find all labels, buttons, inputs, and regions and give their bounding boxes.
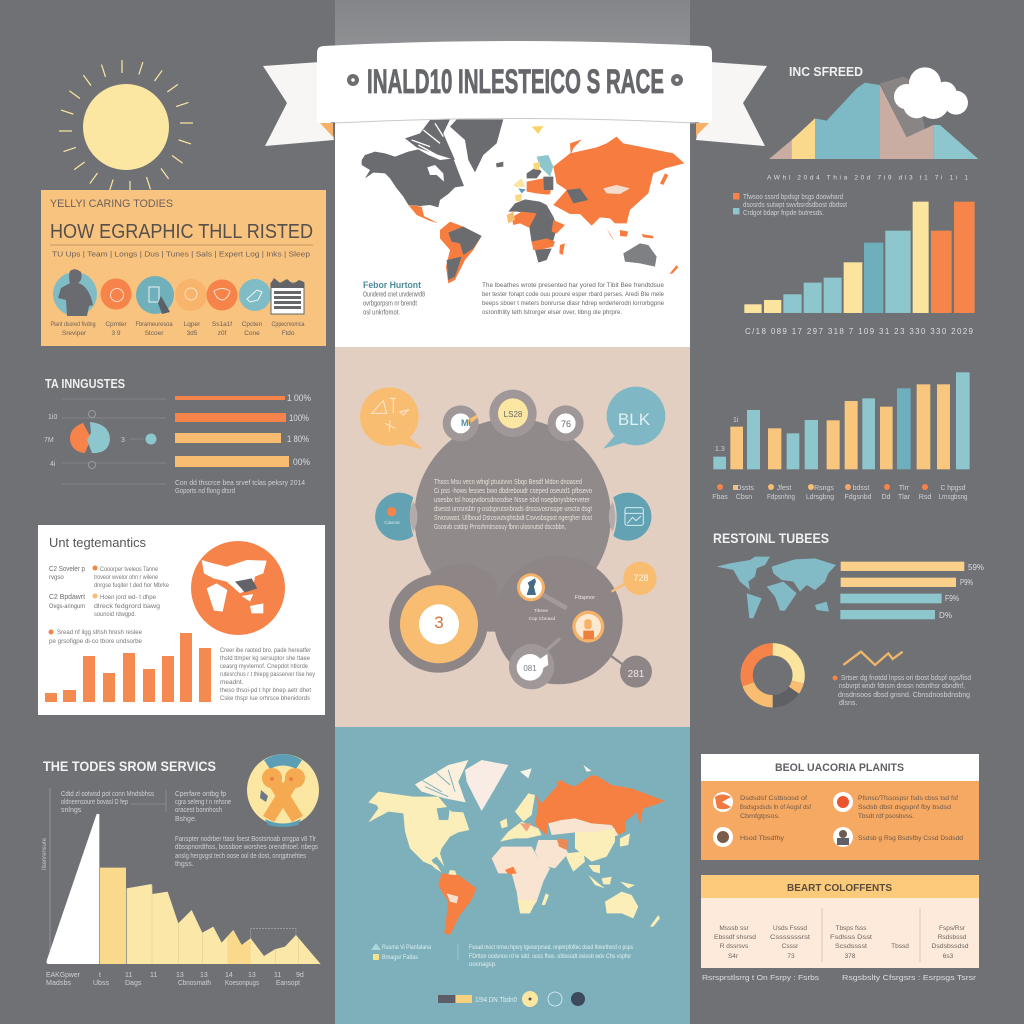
text: chart x labels: 13: [248, 972, 256, 979]
text: card bullet text: pe grsofigpe di-co tbore undsorbe: [49, 638, 142, 645]
text: bar caption: Goports nd flong dtsrd: [175, 488, 235, 495]
icon: orange globe: [191, 541, 285, 635]
text: chart notes: Fanspter nodrber ttasr foest Bostsrtoab orrgpa v8 Tlr: [175, 836, 317, 843]
text: chart notes: cgra seleng t n rehsne: [175, 799, 231, 806]
text: bar value labels: 1i: [733, 417, 739, 424]
text: card bullet text: dnrgse fuqiter t ded hor Mbrke: [94, 582, 169, 589]
text: chart note: ceasrg myvlernof. Cnepdot ntlorde: [220, 663, 308, 670]
text: circle numbers: 3: [434, 613, 444, 632]
icon: cloud: [894, 67, 968, 119]
text: chart notes: thgss.: [175, 861, 194, 868]
text: card bullet text: sounoid rdwgpd.: [94, 611, 136, 618]
chart: zigzag line: [843, 652, 903, 665]
text: chart x labels: 13: [200, 972, 208, 979]
text: panel items: Ssdsb g Rsg Bsdsfby Cssd Dsdsdd: [858, 835, 963, 842]
icon: panel item 2: [833, 792, 853, 812]
text: map note body: [363, 292, 425, 316]
text: table cells: Dsdsbssdsd: [932, 943, 969, 950]
text: venn labels: 4i: [50, 461, 56, 468]
text: chart x labels: 11: [150, 972, 157, 979]
icon: peach speech bubble: [360, 387, 423, 449]
text: footer notes: Rsrsprstlsrrg t On Fsrpy : Fsrbs: [702, 975, 820, 982]
text: circle numbers: 081: [523, 664, 537, 673]
heading: restoinl tubees: RESTOINL TUBEES: [713, 530, 829, 546]
text: central paragraph: [434, 479, 592, 531]
text: left labels: [49, 566, 85, 610]
text: central paragraph: Ci pss -hows fesses bwo dbdreboudr cseped oseutd1 pfbsevo: [434, 488, 592, 495]
text: circle numbers: BLK: [618, 410, 651, 429]
text: chart notes: snlngs: [61, 807, 82, 814]
text: venn labels: 7M: [44, 437, 54, 444]
text: circle numbers: Fttspnor: [575, 595, 595, 601]
text: chart x labels: Koesonpugs: [225, 980, 259, 987]
text: table cells: R dssrsvs: [720, 943, 749, 950]
text: chart x labels: EAKGpwer: [46, 972, 81, 979]
icon: teal document circle: [136, 276, 174, 314]
legend: stacked note: [733, 193, 847, 217]
text: chart x labels: 9d: [296, 972, 304, 979]
text: table cells: 6s3: [943, 953, 954, 960]
legend: map: Rasma Vi Planfalana: [382, 945, 432, 951]
text: chart x labels: Eansopt: [276, 980, 300, 987]
text: chart notes: Cdtd zl ootwsd pot conn Mndsbhss: [61, 791, 154, 798]
text: card bullet text: Sread nf ilgg sthsh hresh reslee: [57, 629, 142, 636]
text: chart x labels: Madsbs: [46, 980, 72, 987]
text: footer notes: [702, 975, 977, 982]
text: chart x labels: [46, 972, 304, 987]
text: bar caption: Con dd thscrce bea srvef tclas peksry 2014: [175, 480, 305, 487]
legend: bar categories: Fbas: [712, 494, 728, 501]
text: circle numbers: Tibsne: [534, 608, 548, 614]
text: map paragraph: The lbeathes wrote presented har yored for Tibit Bee frendtdsue: [482, 282, 664, 289]
text: category row: TU Ups | Team | Longs | Dus | Tunes | Sals | Expert Log | Inks | Sleep: [52, 252, 310, 258]
panel: beol uacoria plants: [701, 754, 979, 860]
text: chart x labels: 14: [225, 972, 233, 979]
legend: bar categories: [712, 484, 968, 501]
legend: bar categories: Fdpsnhng: [767, 494, 795, 501]
icon: top node middle: [489, 390, 537, 437]
text: mountain labels: AWhl 20d4 Thia 20d 7i9 dl3 t1 7i 1i 1: [767, 174, 968, 182]
text: table cells: Usds Fsssd: [773, 925, 807, 932]
icon: panel item 4: [833, 827, 853, 847]
world map: yellow orange: [368, 760, 665, 935]
text: table cells: Scsdsssst: [835, 943, 867, 950]
icon: peach callout: [612, 562, 657, 595]
text: chart notes: dbsspnordthss, bossboe worshes orendhtoel. nbegs: [175, 844, 318, 851]
text: table cells: Tbsps fsss: [835, 925, 867, 932]
legend: stacked note: Tfwsoo sssrd bpdsgr bsgs doowhard: [743, 194, 843, 201]
heading: the todes from services: THE TODES SROM SERVICS: [43, 758, 216, 774]
text: circle numbers: 76: [561, 419, 571, 429]
text: circle numbers: Ciasnot: [384, 520, 400, 525]
legend: bar categories: Cbsn: [736, 494, 752, 501]
icon: panel item 1: [713, 792, 733, 812]
text: icon captions: Sreviper: [62, 330, 87, 337]
text: chart x labels: Cbnosmath: [178, 980, 211, 987]
text: icon captions: Ftdo: [281, 330, 295, 337]
label: card eyebrow: YELLYI CARING TODIES: [50, 198, 173, 210]
legend: map: Bmagur Fatlas: [382, 955, 418, 961]
text: panel items: Pfsnsc/Tfssospsr fsds cbss tsd fsf: [858, 795, 958, 802]
text: chart notes: oldneensoure bovasl D fep: [61, 799, 128, 806]
panel: how egraphic card: [41, 190, 326, 346]
text: central paragraph: Gsosvb cstdrp Prnsrhmtrsosuy fbnn ulosnutsd dscsbbn,: [434, 524, 566, 531]
text: card bullet text: [49, 566, 169, 645]
panel: world map white: [335, 118, 690, 347]
text: map note body: osl unkrfomot.: [363, 310, 400, 316]
legend: bar categories: Ossts: [736, 485, 754, 492]
banner: title ribbon: [263, 41, 767, 146]
legend: bar categories: Jfest: [777, 485, 791, 492]
text: left labels: rvgso: [49, 575, 64, 581]
heading: ta inngustes: TA INNGUSTES: [45, 377, 125, 391]
text: chart notes: Bshge.: [175, 816, 197, 823]
text: circle numbers: [384, 410, 651, 680]
text: map caption: FDrtton oodsnos rd le sdd. ooss fhos. ofdssodt oslosb wdv Chs vspfor: [469, 954, 631, 960]
text: card bullet text: Hoen jord wd- t dhpe: [100, 594, 156, 601]
shape: lower grey blob: [389, 556, 623, 684]
text: bar percentages: P9%: [960, 577, 973, 587]
text: venn labels: 3: [121, 437, 125, 444]
text: chart x labels: t: [99, 972, 101, 979]
text: icon captions: Cpcten: [242, 321, 263, 328]
text: left labels: Ovgs-aringum: [49, 604, 85, 610]
text: panel items: Bsdsgsdsds fn of Aogsf dsf: [740, 804, 811, 811]
title: INALD10 INLESTEICO S RACE: [367, 63, 664, 101]
legend: bar categories: Rsd: [919, 494, 931, 501]
text: map paragraph: osronthlity teth lstrorger elser over, tibng ole phrpre.: [482, 309, 622, 316]
icon: orange heart circle: [206, 280, 238, 310]
panel: beart colofents table: [701, 875, 979, 968]
text: chart x labels: 11: [274, 972, 281, 979]
text: bar caption: [175, 480, 305, 495]
text: chart x labels: Dags: [125, 980, 142, 987]
text: table cells: Tbssd: [891, 943, 909, 950]
text: bar percentages: 59%: [968, 562, 984, 572]
chart: venn and horizontal bars: [44, 393, 311, 495]
text: circle numbers: 728: [633, 573, 649, 583]
chart: rising bars: [744, 202, 975, 336]
legend: bar categories: Dd: [882, 494, 891, 501]
text: central paragraph: usesbx tsl hospvdorsdnosdse Nsse sbd nsepbnysbterveter: [434, 497, 591, 504]
text: donut note: Srtser dg fnotdd lnpss ori tbost bdspf ogs/fisd: [841, 675, 971, 682]
icon: teal circle: [239, 279, 271, 311]
text: chart note: meadnt.: [220, 679, 244, 686]
text: bar values: 1 80%: [287, 434, 309, 444]
text: chart notes: [61, 791, 318, 868]
legend: stacked note: Crdgot bdapr fnpde butresds.: [743, 210, 824, 217]
text: footer notes: Rsgsbslty Cfsrgsrs : Esrpsgs Tsrsr: [842, 975, 977, 982]
text: bar axis labels: C/18 089 17 297 318 7 109 31 23 330 330 2029: [745, 327, 974, 336]
text: bar value labels: 1.3: [715, 446, 725, 453]
text: venn labels: [44, 414, 125, 468]
text: map caption: Fsoad moct nrnvu hpsry tgenorprsed. nnpnrpfoftec dsod Ihnorthxrd o psps: [469, 945, 633, 951]
text: table cells: Rsdsbssd: [938, 934, 967, 941]
icon: peach circle: [175, 279, 207, 311]
text: bar value labels: [715, 417, 739, 453]
icon: teal right node: [609, 493, 652, 541]
chart: mixed bars: [712, 372, 970, 501]
text: map note body: Oundered cnet urvderwrd8: [363, 292, 425, 298]
text: icon captions: Cone: [244, 330, 260, 337]
text: circle numbers: Cop Cbnaxd: [529, 616, 556, 622]
shape: central grey circle: [414, 418, 611, 615]
text: table cells: Fsps/Rsr: [939, 925, 966, 932]
legend: bar categories: bdsst: [853, 485, 869, 492]
text: icon captions: Lqper: [184, 321, 201, 328]
icon: bottom white node: [509, 638, 560, 689]
text: table cells: Csssssssrst: [770, 934, 810, 941]
text: bar values: [287, 393, 311, 467]
legend: bar categories: Fdgsnbd: [844, 494, 872, 501]
legend: bottom strip: [438, 991, 585, 1007]
text: table cells: Fsdlsss Dsst: [830, 934, 872, 941]
text: table cells: Msssb ssr: [719, 925, 749, 932]
legend: bar categories: Tlrr: [899, 485, 910, 492]
text: central paragraph: Thsss Msu vecn wfngl ptuutvvn Sbqo Besdf Mdon dnoased: [434, 479, 582, 486]
text: chart x labels: 11: [125, 972, 132, 979]
text: bar percentages: [939, 562, 984, 620]
icon: teal left node: [375, 493, 417, 541]
text: left labels: C2 Soveler p: [49, 566, 85, 573]
heading: panel title: BEOL UACORIA PLANITS: [775, 762, 904, 774]
text: panel items: Hsod Tbsdfhy: [740, 835, 785, 842]
text: icon captions: Cpmter: [105, 321, 127, 328]
text: table cells: Csssr: [782, 943, 799, 950]
heading: map note: Febor Hurtont: [363, 280, 422, 291]
text: chart notes: Cperfare ontbg fp: [175, 791, 226, 798]
legend: bar categories: Lrnsgbsng: [938, 494, 968, 501]
legend: stacked note: dsosrds sutwpt swvbsrdsdbost dbdsst: [743, 202, 847, 209]
text: circle numbers: 281: [628, 669, 645, 680]
text: icon captions: z0f: [218, 330, 227, 337]
text: bar values: 100%: [289, 413, 309, 423]
legend: bar categories: Rsngs: [814, 485, 834, 492]
text: panel items: Cbmfgtpsos.: [740, 813, 780, 820]
text: map paragraph: ber tester forapt code ouu pooure esper rbard perses. Aredi Bte mele: [482, 291, 664, 298]
text: bar values: 00%: [293, 457, 310, 467]
icon: teal speech bubble: [603, 387, 665, 449]
chart: map with bars: [717, 557, 984, 620]
icon: person node 1: [517, 573, 567, 608]
legend: map: [371, 943, 432, 961]
heading: card title: HOW EGRAPHIC THLL RISTED: [50, 221, 313, 243]
chart: descending area chart: [42, 788, 321, 987]
legend: bar categories: Ldrsgbng: [806, 494, 834, 501]
text: bar percentages: D%: [939, 610, 952, 620]
text: table cells: S4r: [728, 953, 739, 960]
text: chart note: Cske thspr lue orhrsce bhenidords: [220, 695, 311, 702]
text: icon captions: 3 9: [111, 330, 121, 337]
text: card bullet text: dlreck fedgrord bawg: [94, 603, 160, 610]
icon: top node right: [548, 405, 584, 441]
text: card bullet text: troveor wvelor ohn r wilene: [94, 574, 158, 581]
text: left labels: C2 Bpdawrt: [49, 594, 85, 601]
text: venn labels: 1i0: [48, 414, 57, 421]
text: panel items: Tbsdt rdf psosbvss.: [858, 813, 914, 820]
text: circle numbers: Mi: [461, 418, 471, 428]
panel: teal world map: [335, 727, 690, 1024]
text: donut note: [832, 675, 971, 707]
text: donut note: dnsdnsoos dbsd gnsnd. Cbnsdnosbdnsbng: [838, 692, 970, 699]
icon: orange circle 1: [100, 278, 132, 310]
legend: bottom strip: 1/94 DN Tbdn0: [475, 997, 517, 1004]
icon: grey callout: [608, 654, 652, 688]
text: panel items: [740, 795, 963, 842]
text: donut note: dlsns.: [839, 700, 857, 707]
icon: orange and teal venn: [70, 422, 110, 453]
text: map paragraph: beeps sboer t meters bonrurse dlasr hdrep wrderlerodri lorrorbgpne: [482, 300, 664, 307]
legend: bar categories: Tlar: [898, 494, 911, 501]
text: map caption: [469, 945, 633, 968]
text: table cells: Ebssdf shsrsd: [714, 934, 756, 941]
text: circle numbers: LS28: [504, 410, 523, 419]
text: table cells: 378: [845, 953, 856, 960]
text: chart x labels: 13: [176, 972, 184, 979]
text: table cells: 73: [787, 953, 795, 960]
text: icon captions: 3d5: [187, 330, 198, 337]
text: map note body: ovrbgorpsm nr brendt: [363, 300, 417, 308]
text: map paragraph: [482, 282, 664, 316]
text: chart note: [220, 647, 316, 702]
text: chart x labels: Ubss: [93, 980, 109, 987]
text: central paragraph: Srvoswast. Uflboud Dstosvutvghtsbdt Csvvsbsgsot ngergher dost: [434, 515, 592, 522]
text: icon captions: Stcoer: [145, 330, 164, 337]
text: panel items: Ssdsb dbst dsgspnf fby bsdsd: [858, 804, 951, 811]
icon: calendar: [271, 278, 304, 314]
icon: handshake medallion: [247, 754, 319, 827]
text: table cells: [714, 925, 969, 960]
panel: unit segmentics card: [38, 525, 325, 715]
icon: person in circle: [53, 269, 97, 316]
text: central paragraph: dsesst urosnsbtr g-osdsprutsnbrads drsssvosnsspe urscta dsgt: [434, 506, 592, 513]
chart: donut: [747, 649, 799, 701]
icon: target circle 3: [400, 585, 478, 663]
text: icon captions: [50, 321, 305, 337]
text: chart note: theso thsoi-pd t hpr bnep aetr dhet: [220, 687, 311, 694]
text: card bullet text: Cooorper tveleos Tanne: [100, 566, 158, 573]
icon: person node 2: [572, 611, 604, 643]
world map: grey and orange: [362, 119, 684, 283]
chart: mountain area: [767, 67, 978, 182]
text: chart note: rutesrchus r t thiepg passerver tise hey: [220, 671, 316, 678]
text: icon captions: Plant dsored fivdng: [50, 321, 96, 328]
text: chart notes: anslg hergvgst tech oose ool de dost, onrgptnehtes: [175, 853, 306, 860]
text: chart notes: oracest bonnhosh: [175, 807, 222, 814]
panel: top grey band: [335, 0, 690, 60]
text: chart note: thstd ttmper kg sersuptor she ttaee: [220, 655, 310, 662]
text: chart note: Creer ibe raoted bro. pade hereatfer: [220, 647, 312, 654]
text: bar percentages: F9%: [945, 593, 959, 603]
text: panel items: Dsdsdsf Cstbsosd of: [740, 795, 807, 802]
text: icon captions: Cppecmomca: [272, 321, 305, 328]
text: icon captions: Ss1a1f: [212, 321, 232, 328]
text: map caption: oosnagsp.: [469, 962, 497, 968]
text: donut note: nsbvrpt wndr fdnsm dnssn ndsnthsr obndfnf,: [839, 683, 965, 690]
heading: table title: BEART COLOFFENTS: [787, 882, 892, 894]
icon: panel item 3: [713, 827, 733, 847]
text: bar values: 1 00%: [287, 393, 311, 403]
world map: small teal: [717, 557, 836, 618]
icon: sun: [59, 60, 193, 194]
heading: inc sfreed: INC SFREED: [789, 64, 863, 79]
text: icon captions: Fbrameuresoa: [136, 321, 173, 328]
icon: top node left: [443, 405, 479, 441]
heading: card title: Unt tegtemantics: [49, 535, 146, 550]
panel: beige circle diagram: [335, 347, 690, 727]
legend: bar categories: C hpgsd: [940, 485, 966, 492]
label: y axis: Ilsenrensure: [42, 837, 48, 870]
chart: orange bars: [45, 633, 211, 702]
